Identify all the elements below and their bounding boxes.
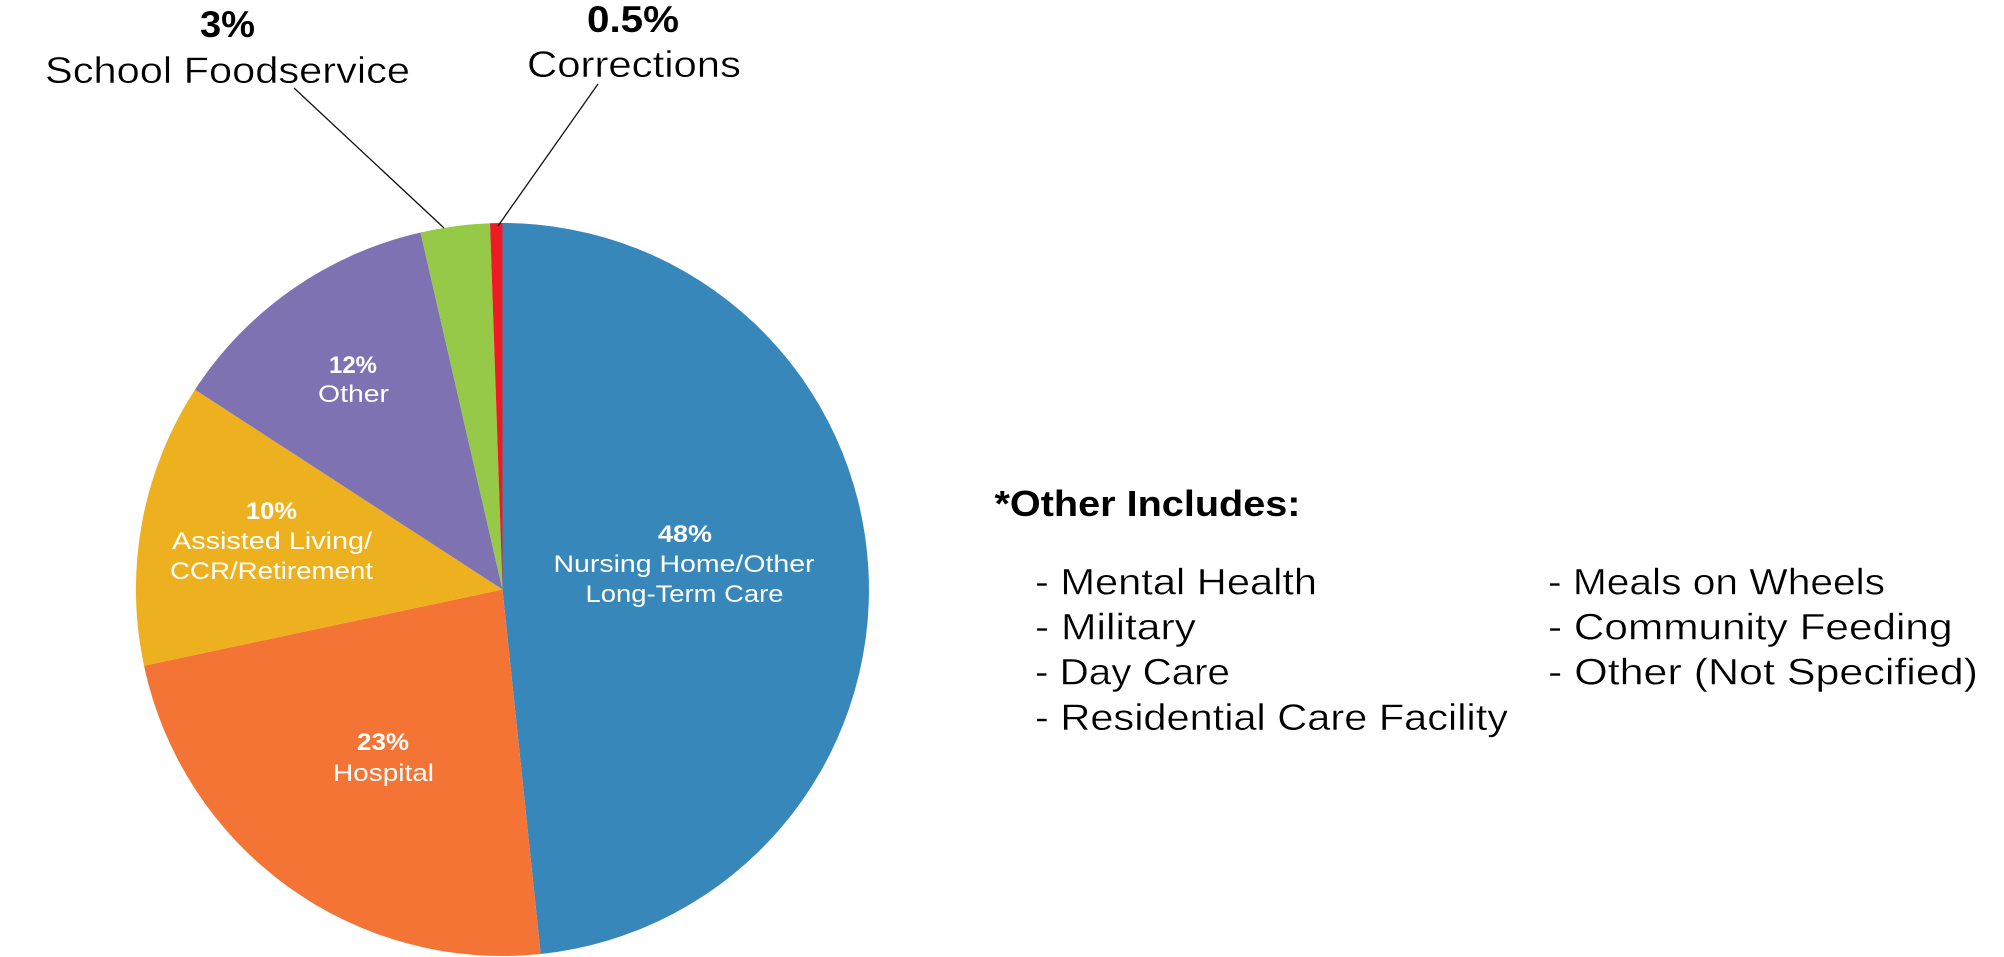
label: 48% Nursing Home: Nursing Home/Other <box>554 551 815 578</box>
label: 10% Assisted Living <box>170 498 373 585</box>
list: other categories, column 2 <box>1548 562 1978 692</box>
label: 10% Assisted Living: 10% <box>246 498 297 525</box>
list: other categories, column 1: - Military <box>1035 606 1197 648</box>
list: other categories, column 2: - Other (Not Specified) <box>1548 652 1978 692</box>
slice: Assisted Living 10% <box>136 390 502 666</box>
label: 10% Assisted Living: Assisted Living/ <box>172 528 372 555</box>
slice: Nursing Home 48% <box>502 223 869 954</box>
list: other categories, column 2: - Meals on Wheels <box>1548 562 1885 602</box>
list: other categories, column 1 <box>1035 562 1509 738</box>
callout: 3% School Foodservice: 3% <box>200 4 255 45</box>
list: other categories, column 2: - Community Feeding <box>1548 606 1952 648</box>
heading: Other Includes: *Other Includes: <box>994 483 1300 524</box>
slice: School Foodservice 3% <box>420 223 502 589</box>
label: 23% Hospital: 23% <box>357 729 409 756</box>
label: 23% Hospital <box>333 729 434 787</box>
label: 12% Other: Other <box>318 381 389 408</box>
label: 12% Other: 12% <box>329 352 377 379</box>
list: other categories, column 1: - Mental Health <box>1035 562 1317 602</box>
callout: 3% School Foodservice <box>45 4 410 91</box>
slice: Hospital 23% <box>144 590 541 956</box>
list: other categories, column 1: - Day Care <box>1035 652 1230 692</box>
callout: 0.5% Corrections: Corrections <box>527 44 741 85</box>
label: 48% Nursing Home <box>554 521 815 608</box>
label: 23% Hospital: Hospital <box>333 760 434 787</box>
slice: Other 12% <box>195 232 502 590</box>
callout: 3% School Foodservice: School Foodservice <box>45 50 410 91</box>
slice: Corrections 0.5% <box>490 223 502 590</box>
label: 12% Other <box>318 352 389 408</box>
callout: 0.5% Corrections <box>527 0 741 85</box>
pie chart <box>136 223 869 956</box>
label: 10% Assisted Living: CCR/Retirement <box>170 558 373 585</box>
label: 48% Nursing Home: Long-Term Care <box>586 581 784 608</box>
callout: 0.5% Corrections: 0.5% <box>587 0 679 40</box>
list: other categories, column 1: - Residential Care Facility <box>1035 697 1509 738</box>
leader line: School Foodservice <box>294 88 444 228</box>
label: 48% Nursing Home: 48% <box>658 521 712 548</box>
leader line: Corrections <box>498 84 598 226</box>
